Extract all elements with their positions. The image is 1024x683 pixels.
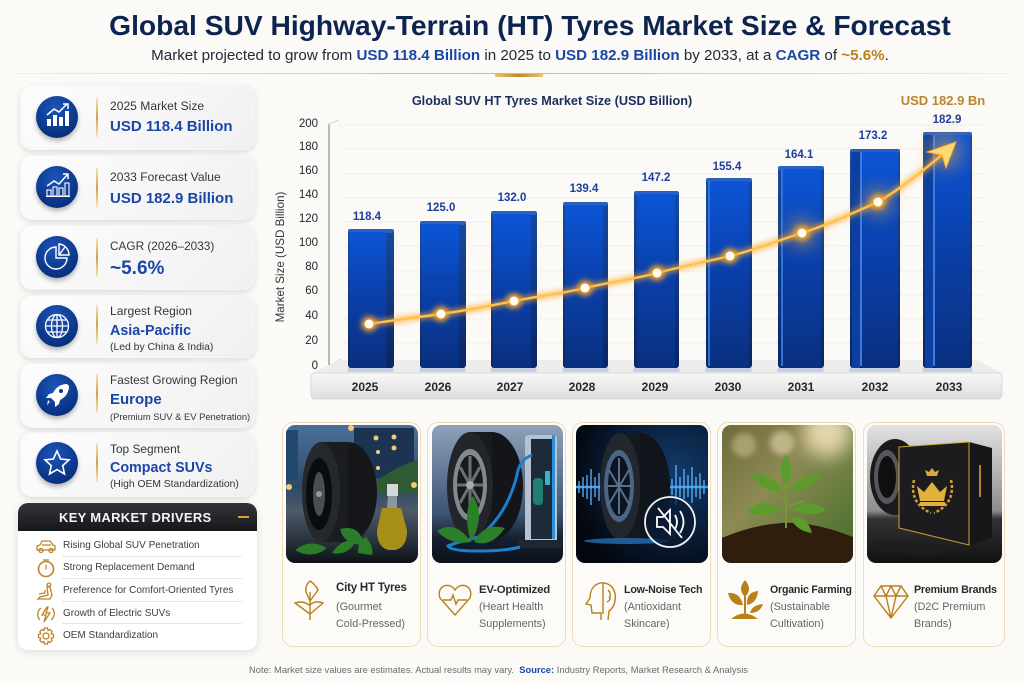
- title: Global SUV Highway-Terrain (HT) Tyres Market Size & Forecast: [109, 9, 951, 41]
- driver: replacement demand: [38, 559, 195, 578]
- panel: largest region: Largest Region: [110, 304, 192, 318]
- driver: OEM standardization: [38, 627, 158, 645]
- description: [336, 601, 405, 630]
- y axis labels: 140: [299, 189, 318, 201]
- panel: 2033 forecast value: USD 182.9 Billion: [110, 190, 233, 207]
- description: Supplements): [479, 618, 546, 630]
- bar value labels: 118.4: [353, 211, 382, 223]
- driver: electric SUVs: [37, 606, 170, 622]
- panel: top segment: Compact SUVs: [110, 460, 212, 476]
- driver: SUV penetration: Rising Global SUV Penetration: [63, 540, 200, 551]
- description: (Gourmet: [336, 601, 382, 613]
- icon: diamond: [873, 584, 909, 619]
- driver: replacement demand: Strong Replacement Demand: [63, 562, 195, 573]
- icon: pie chart: [36, 236, 78, 278]
- icon: star: [36, 442, 78, 484]
- label: Premium Brands: [914, 584, 997, 596]
- label: Organic Farming: [770, 584, 852, 596]
- platform: [311, 360, 1002, 399]
- description: [479, 601, 546, 630]
- panel: 2025 market size: USD 118.4 Billion: [110, 118, 233, 135]
- y axis labels: 0: [312, 360, 318, 372]
- heading: key market drivers: KEY MARKET DRIVERS: [59, 510, 212, 525]
- panel: CAGR: CAGR (2026–2033): [110, 239, 214, 253]
- description: [624, 601, 681, 630]
- x axis labels: 2033: [936, 380, 963, 394]
- icon: heart pulse: [438, 584, 472, 616]
- panel: fastest growing region: [20, 363, 255, 428]
- icon: head profile: [584, 582, 616, 620]
- y axis labels: 200: [299, 118, 318, 130]
- y axis labels: 60: [305, 285, 318, 297]
- panel: Organic Farming: [717, 422, 856, 647]
- y axis labels: 120: [299, 213, 318, 225]
- panel: CAGR: [20, 225, 255, 290]
- driver: SUV penetration: [36, 540, 200, 554]
- icon: forecast chart: [36, 166, 78, 208]
- panel: 2033 forecast value: 2033 Forecast Value: [110, 170, 221, 184]
- y axis labels: 100: [299, 237, 318, 249]
- bar value labels: 132.0: [498, 192, 526, 204]
- icon: sprout outline: [294, 580, 324, 620]
- bar value labels: 147.2: [642, 172, 670, 184]
- panel: largest region: (Led by China & India): [110, 342, 213, 353]
- icon: rocket: [36, 374, 78, 416]
- image: premium black box with crown: [867, 425, 1002, 563]
- bar value labels: 139.4: [570, 183, 599, 195]
- heading: key market drivers: [18, 503, 257, 531]
- y axis labels: 40: [305, 310, 318, 322]
- panel: 2025 market size: 2025 Market Size: [110, 99, 204, 113]
- panel: fastest growing region: Fastest Growing Region: [110, 373, 238, 387]
- footnote: Note: Market size values are estimates. Actual results may vary. Source: Industry Reports, Market Research & Analysis: [249, 664, 748, 675]
- bars: [348, 132, 972, 368]
- label: City HT Tyres: [336, 582, 407, 594]
- chart title: Global SUV HT Tyres Market Size (USD Billion): [412, 94, 692, 108]
- bar value labels: [353, 114, 961, 223]
- panel: fastest growing region: Europe: [110, 391, 162, 408]
- x axis labels: 2029: [642, 380, 669, 394]
- driver: OEM standardization: OEM Standardization: [63, 630, 158, 641]
- description: (Antioxidant: [624, 601, 681, 613]
- y axis title: Market Size (USD Billion): [274, 191, 287, 322]
- panel: largest region: Asia-Pacific: [110, 323, 191, 339]
- panel: top segment: [20, 432, 255, 497]
- driver: electric SUVs: Growth of Electric SUVs: [63, 608, 170, 619]
- panel: EV-Optimized: [427, 422, 566, 647]
- panel: key market drivers: [18, 503, 257, 650]
- x axis labels: [352, 380, 963, 394]
- description: (Heart Health: [479, 601, 543, 613]
- panel: top segment: (High OEM Standardization): [110, 479, 239, 490]
- label: EV-Optimized: [479, 584, 550, 596]
- callout: USD 182.9 Bn: USD 182.9 Bn: [901, 93, 985, 108]
- description: [914, 601, 985, 630]
- image: seedling in soil: [722, 425, 853, 563]
- x axis labels: 2028: [569, 380, 596, 394]
- trend line with arrow: [362, 136, 961, 332]
- description: Cultivation): [770, 618, 824, 630]
- bar value labels: 125.0: [427, 202, 455, 214]
- gridlines and y axis: [340, 125, 985, 343]
- icon: globe: [36, 305, 78, 347]
- panel: Premium Brands: [863, 422, 1005, 647]
- x axis labels: 2026: [425, 380, 452, 394]
- description: [770, 601, 830, 630]
- y axis labels: 180: [299, 141, 318, 153]
- description: (D2C Premium: [914, 601, 985, 613]
- x axis labels: 2032: [862, 380, 889, 394]
- icon: bar growth: [36, 96, 78, 138]
- bar value labels: 173.2: [859, 130, 887, 142]
- image: tyre with EV charger: [432, 425, 563, 563]
- image: tyre with sound wave: [576, 425, 708, 563]
- y axis labels: 80: [305, 261, 318, 273]
- description: Cold-Pressed): [336, 618, 405, 630]
- y axis labels: 160: [299, 165, 318, 177]
- panel: 2033 forecast value: [20, 155, 255, 220]
- panel: largest region: [20, 295, 255, 358]
- panel: CAGR: ~5.6%: [110, 258, 164, 279]
- y axis labels: [299, 118, 318, 372]
- panel: 2025 market size: [20, 85, 255, 150]
- description: Skincare): [624, 618, 670, 630]
- bar value labels: 182.9: [933, 114, 961, 126]
- bar value labels: 164.1: [785, 149, 814, 161]
- x axis labels: 2025: [352, 380, 379, 394]
- x axis labels: 2030: [715, 380, 742, 394]
- x axis labels: 2031: [788, 380, 815, 394]
- icon: plant solid: [728, 580, 763, 619]
- panel: fastest growing region: (Premium SUV & EV Penetration): [110, 411, 250, 422]
- description: Brands): [914, 618, 952, 630]
- description: (Sustainable: [770, 601, 830, 613]
- subtitle: Market projected to grow from USD 118.4 Billion in 2025 to USD 182.9 Billion by 2033, at a CAGR of ~5.6%.: [151, 47, 889, 64]
- driver: comfort tyres: Preference for Comfort-Oriented Tyres: [63, 585, 233, 596]
- bar value labels: 155.4: [713, 161, 742, 173]
- x axis labels: 2027: [497, 380, 524, 394]
- panel: top segment: Top Segment: [110, 442, 180, 456]
- image: tyre with oil bottle: [286, 425, 418, 563]
- y axis labels: 20: [305, 335, 318, 347]
- panel: Low-Noise Tech: [572, 422, 711, 647]
- driver: comfort tyres: [36, 582, 233, 600]
- label: Low-Noise Tech: [624, 584, 702, 596]
- panel: City HT Tyres: [282, 422, 421, 647]
